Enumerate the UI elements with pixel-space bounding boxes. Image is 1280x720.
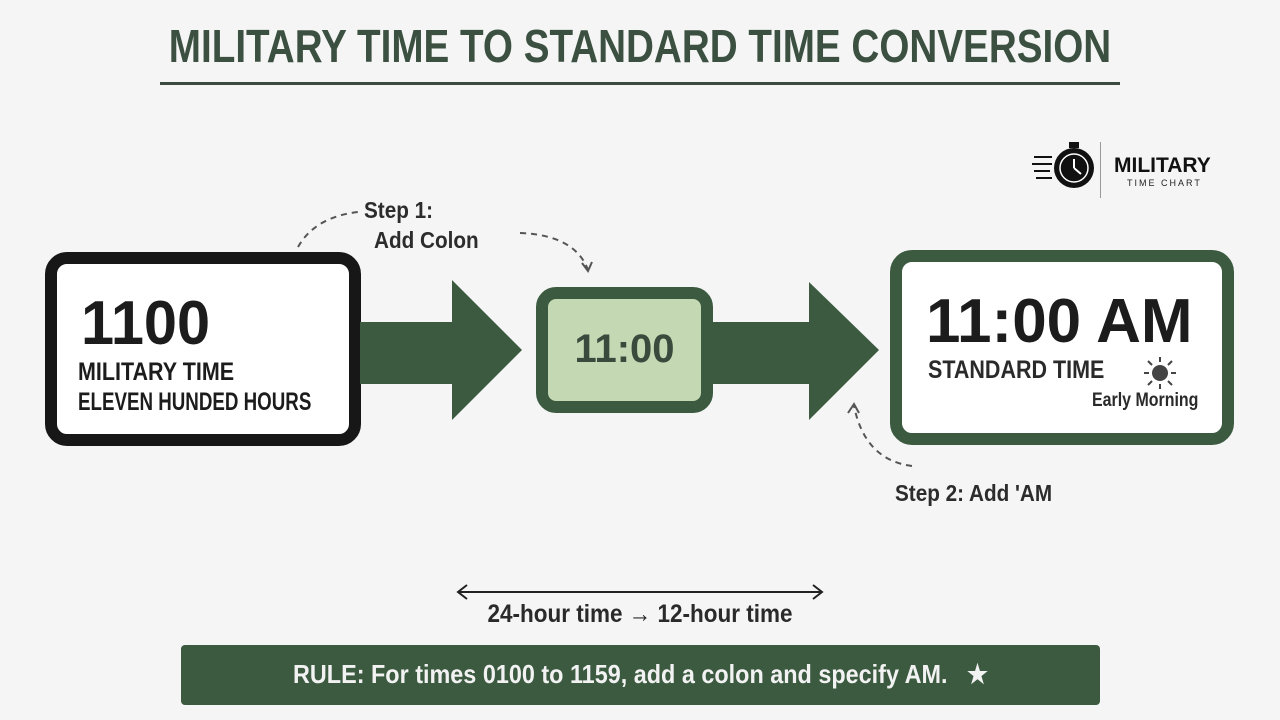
box: standard time: STANDARD TIME <box>928 356 1104 384</box>
step 2 annotation <box>847 402 1052 506</box>
step 1 annotation <box>297 197 593 273</box>
rule bar <box>181 645 1100 705</box>
title: MILITARY TIME TO STANDARD TIME CONVERSION <box>169 20 1111 72</box>
rule bar: RULE: For times 0100 to 1159, add a colon and specify AM. ★ <box>293 659 988 689</box>
box: standard time: 11:00 AM <box>926 287 1192 356</box>
box: military time: 1100 <box>81 289 210 358</box>
arrow 1 <box>360 280 522 420</box>
box: standard time: Early Morning <box>1092 390 1198 411</box>
double arrow <box>456 584 824 600</box>
logo: TIME CHART <box>1127 178 1202 188</box>
box: military time: MILITARY TIME <box>78 358 234 386</box>
icon: sun <box>1144 357 1176 389</box>
logo <box>1032 142 1211 198</box>
box: 11:00: 11:00 <box>574 327 675 371</box>
arrow 2 <box>713 282 879 420</box>
step 2 annotation: Step 2: Add 'AM <box>895 480 1052 506</box>
box: 11:00 <box>536 287 713 413</box>
step 1 annotation: Step 1: <box>364 197 433 223</box>
box: standard time <box>890 250 1234 445</box>
step 1 annotation: Add Colon <box>374 227 479 253</box>
logo: MILITARY <box>1114 154 1211 177</box>
box: military time: ELEVEN HUNDED HOURS <box>78 388 311 416</box>
box: military time <box>45 252 361 446</box>
caption: 24-hour to 12-hour: 24-hour time → 12-hour time <box>487 600 793 628</box>
